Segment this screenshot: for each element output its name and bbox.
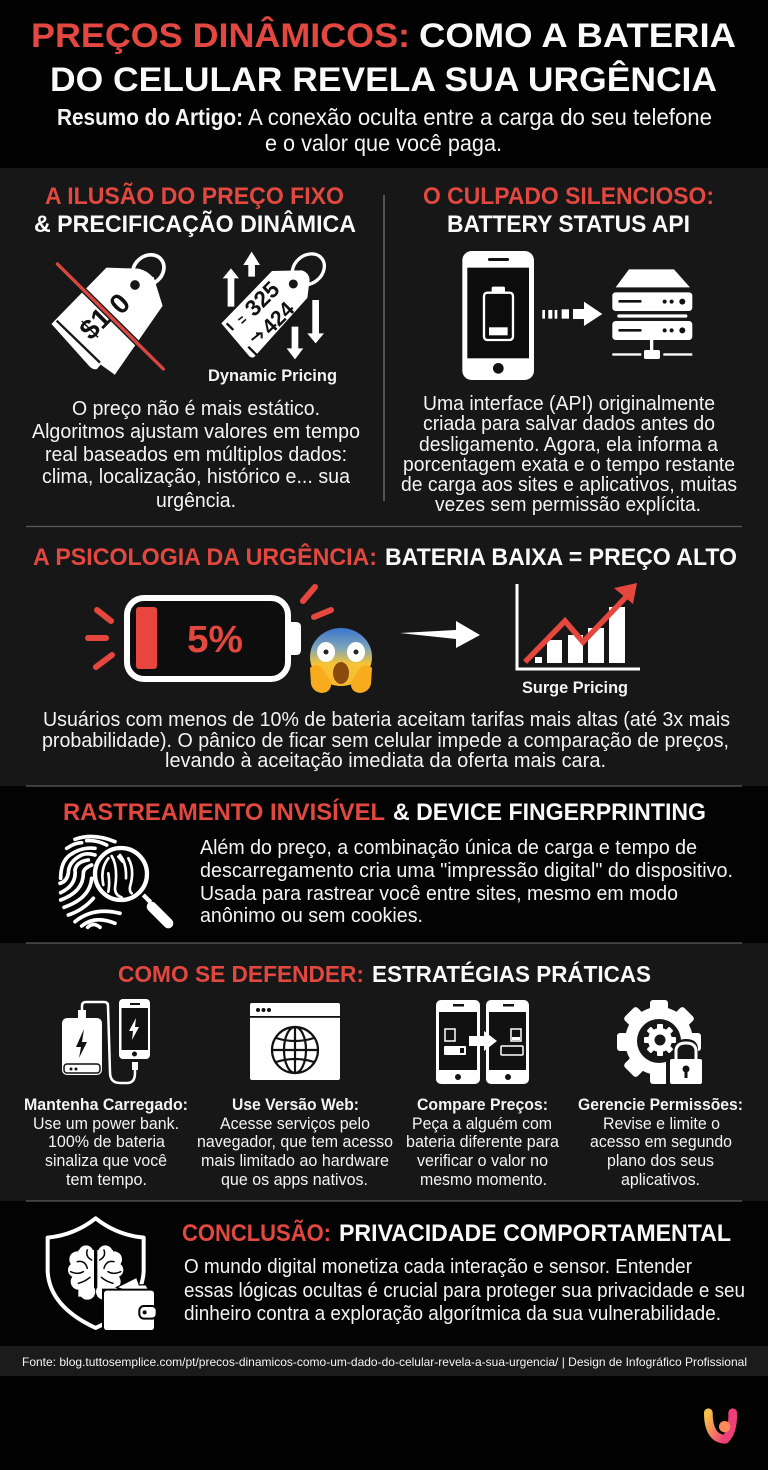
text block: conclusion xyxy=(184,1256,745,1325)
title: PREÇOS DINÂMICOS: xyxy=(31,17,410,55)
panel: invisible tracking xyxy=(60,798,733,927)
icon: logo xyxy=(708,1413,733,1439)
text: use web version: mais limitado ao hardware xyxy=(201,1152,389,1170)
heading: fixed price illusion: & PRECIFICAÇÃO DINÂMICA xyxy=(34,210,356,238)
heading: invisible tracking xyxy=(63,798,706,826)
icon: fingerprint with magnifier xyxy=(60,836,168,927)
text block: price no longer static: Algoritmos ajustam valores em tempo xyxy=(32,421,360,443)
text: keep charged: tem tempo. xyxy=(66,1171,147,1189)
heading: conclusion xyxy=(182,1219,731,1247)
panel: fixed price illusion xyxy=(32,182,360,512)
text: manage permissions: acesso em segundo xyxy=(590,1133,732,1151)
strategy: use web version xyxy=(197,1003,393,1189)
text block: api explanation: vezes sem permissão explícita. xyxy=(435,494,701,516)
text block: fingerprinting explanation: Além do preço, a combinação única de carga e tempo de xyxy=(200,837,697,859)
subtitle: article summary: A conexão oculta entre a carga do seu telefone xyxy=(248,104,712,130)
text block: conclusion: O mundo digital monetiza cada interação e sensor. Entender xyxy=(184,1256,692,1278)
icon: crossed out price tags: $1 xyxy=(73,302,117,346)
text: keep charged: Mantenha Carregado: xyxy=(24,1096,188,1114)
text block: price no longer static xyxy=(32,398,360,512)
text: keep charged xyxy=(24,1096,188,1189)
text: keep charged: Use um power bank. xyxy=(33,1115,179,1133)
title: DO CELULAR REVELA SUA URGÊNCIA xyxy=(50,61,717,99)
icon: dynamic price tag with arrows: 325 xyxy=(239,276,284,321)
text: use web version: Acesse serviços pelo xyxy=(220,1115,370,1133)
panel: how to defend yourself xyxy=(24,960,743,1189)
heading: defence strategies xyxy=(118,960,651,987)
heading: fixed price illusion xyxy=(34,182,356,238)
heading: silent culprit: O CULPADO SILENCIOSO: xyxy=(423,183,714,210)
icon: shield with brain and wallet xyxy=(48,1218,157,1332)
text block: price no longer static: clima, localização, histórico e... sua xyxy=(42,466,351,488)
heading: invisible tracking: RASTREAMENTO INVISÍVEL xyxy=(63,798,385,826)
icon: dynamic price tag with arrows: 424 xyxy=(257,297,299,339)
text: manage permissions: Gerencie Permissões: xyxy=(578,1096,743,1114)
text block: urgency explanation: probabilidade). O pânico de ficar sem celular impede a comparação de preços, xyxy=(42,730,729,752)
subtitle: article summary: Resumo do Artigo: xyxy=(57,104,243,130)
heading: defence strategies: ESTRATÉGIAS PRÁTICAS xyxy=(372,960,651,987)
label: dynamic pricing: Dynamic Pricing xyxy=(208,367,337,385)
text block: price no longer static: urgência. xyxy=(156,490,236,512)
strategy: keep charged xyxy=(24,999,188,1189)
text: keep charged: 100% de bateria xyxy=(48,1133,166,1151)
strategy: compare prices xyxy=(406,1000,560,1189)
text block: api explanation: de carga aos sites e aplicativos, muitas xyxy=(401,474,737,496)
text block: fingerprinting explanation: descarregamento cria uma "impressão digital" do dispositivo. xyxy=(200,860,733,882)
text: compare prices: Compare Preços: xyxy=(417,1096,548,1114)
heading: silent culprit xyxy=(423,183,714,238)
heading: psychology of urgency: BATERIA BAIXA = PREÇO ALTO xyxy=(385,544,737,571)
text block: conclusion: dinheiro contra a exploração algorítmica da sua vulnerabilidade. xyxy=(184,1303,721,1325)
icon: dynamic price tag with arrows xyxy=(220,247,331,359)
subtitle: article summary: e o valor que você paga. xyxy=(265,130,502,156)
icon: gear with padlock xyxy=(617,1000,706,1088)
icon: screaming face emoji xyxy=(310,628,372,693)
strategy: manage permissions xyxy=(578,1000,743,1189)
text: use web version: que os apps nativos. xyxy=(221,1171,368,1189)
heading: conclusion: CONCLUSÃO: xyxy=(182,1219,331,1247)
icon: low battery 5% xyxy=(88,587,331,679)
chart: surge pricing xyxy=(517,583,640,669)
text block: api explanation xyxy=(401,393,737,516)
heading: psychology of urgency: A PSICOLOGIA DA URGÊNCIA: xyxy=(33,543,377,571)
text: manage permissions: Revise e limite o xyxy=(603,1115,720,1133)
text block: urgency explanation: levando à aceitação imediata da oferta mais cara. xyxy=(165,750,606,772)
text block: fingerprinting explanation: Usada para rastrear você entre sites, mesmo em modo xyxy=(200,883,678,905)
subtitle: article summary xyxy=(57,104,712,156)
text: compare prices: verificar o valor no xyxy=(417,1152,548,1170)
text: compare prices: bateria diferente para xyxy=(406,1133,560,1151)
text block: api explanation: desligamento. Agora, ela informa a xyxy=(419,434,719,456)
text block: price no longer static: O preço não é mais estático. xyxy=(72,398,320,420)
text: keep charged: sinaliza que você xyxy=(45,1152,167,1170)
text: use web version: Use Versão Web: xyxy=(232,1096,359,1114)
arrow: low battery to surge xyxy=(400,621,480,648)
text block: api explanation: criada para salvar dados antes do xyxy=(423,413,715,435)
icon: browser with globe xyxy=(250,1003,340,1080)
icon: crossed out price tags xyxy=(52,249,170,376)
text: manage permissions: aplicativos. xyxy=(621,1171,700,1189)
text block: api explanation: Uma interface (API) originalmente xyxy=(423,393,715,415)
text block: urgency explanation xyxy=(42,709,730,772)
text: compare prices: Peça a alguém com xyxy=(412,1115,552,1133)
icon: crossed out price tags: 0 xyxy=(103,287,136,320)
icon: two phones compared xyxy=(436,1000,529,1084)
text: manage permissions xyxy=(578,1096,743,1189)
text: compare prices xyxy=(406,1096,560,1189)
text block: price no longer static: real baseados em múltiplos dados: xyxy=(45,444,347,466)
footer source: Fonte: blog.tuttosemplice.com/pt/precos-dinamicos-como-um-dado-do-celular-revela-a-sua-urgencia/ | Design de Infográfico Profissional xyxy=(22,1355,747,1369)
text block: fingerprinting explanation: anônimo ou sem cookies. xyxy=(200,905,423,927)
icon: phone sending battery data to server xyxy=(462,251,692,380)
panel: psychology of urgency xyxy=(33,543,737,772)
title: COMO A BATERIA xyxy=(419,17,736,55)
heading: invisible tracking: & DEVICE FINGERPRINTING xyxy=(393,799,706,826)
text: use web version: navegador, que tem acesso xyxy=(197,1133,393,1151)
title xyxy=(31,17,736,99)
text: use web version xyxy=(197,1096,393,1189)
icon: power bank and phone xyxy=(62,999,150,1083)
text: manage permissions: plano dos seus xyxy=(607,1152,714,1170)
text: compare prices: mesmo momento. xyxy=(420,1171,547,1189)
heading: psychology of urgency xyxy=(33,543,737,571)
icon: low battery 5%: 5% xyxy=(187,619,243,661)
text block: api explanation: porcentagem exata e o tempo restante xyxy=(403,454,735,476)
text block: conclusion: essas lógicas ocultas é crucial para proteger sua privacidade e seu xyxy=(184,1280,745,1302)
label: surge pricing: Surge Pricing xyxy=(522,679,628,697)
heading: defence strategies: COMO SE DEFENDER: xyxy=(118,961,364,987)
heading: silent culprit: BATTERY STATUS API xyxy=(447,211,690,238)
text block: urgency explanation: Usuários com menos de 10% de bateria aceitam tarifas mais altas (até 3x mais xyxy=(43,709,730,731)
heading: conclusion: PRIVACIDADE COMPORTAMENTAL xyxy=(339,1220,731,1247)
heading: fixed price illusion: A ILUSÃO DO PREÇO FIXO xyxy=(45,182,344,210)
panel: conclusion xyxy=(48,1218,745,1332)
panel: battery status api xyxy=(401,183,737,516)
text block: fingerprinting explanation xyxy=(200,837,733,927)
